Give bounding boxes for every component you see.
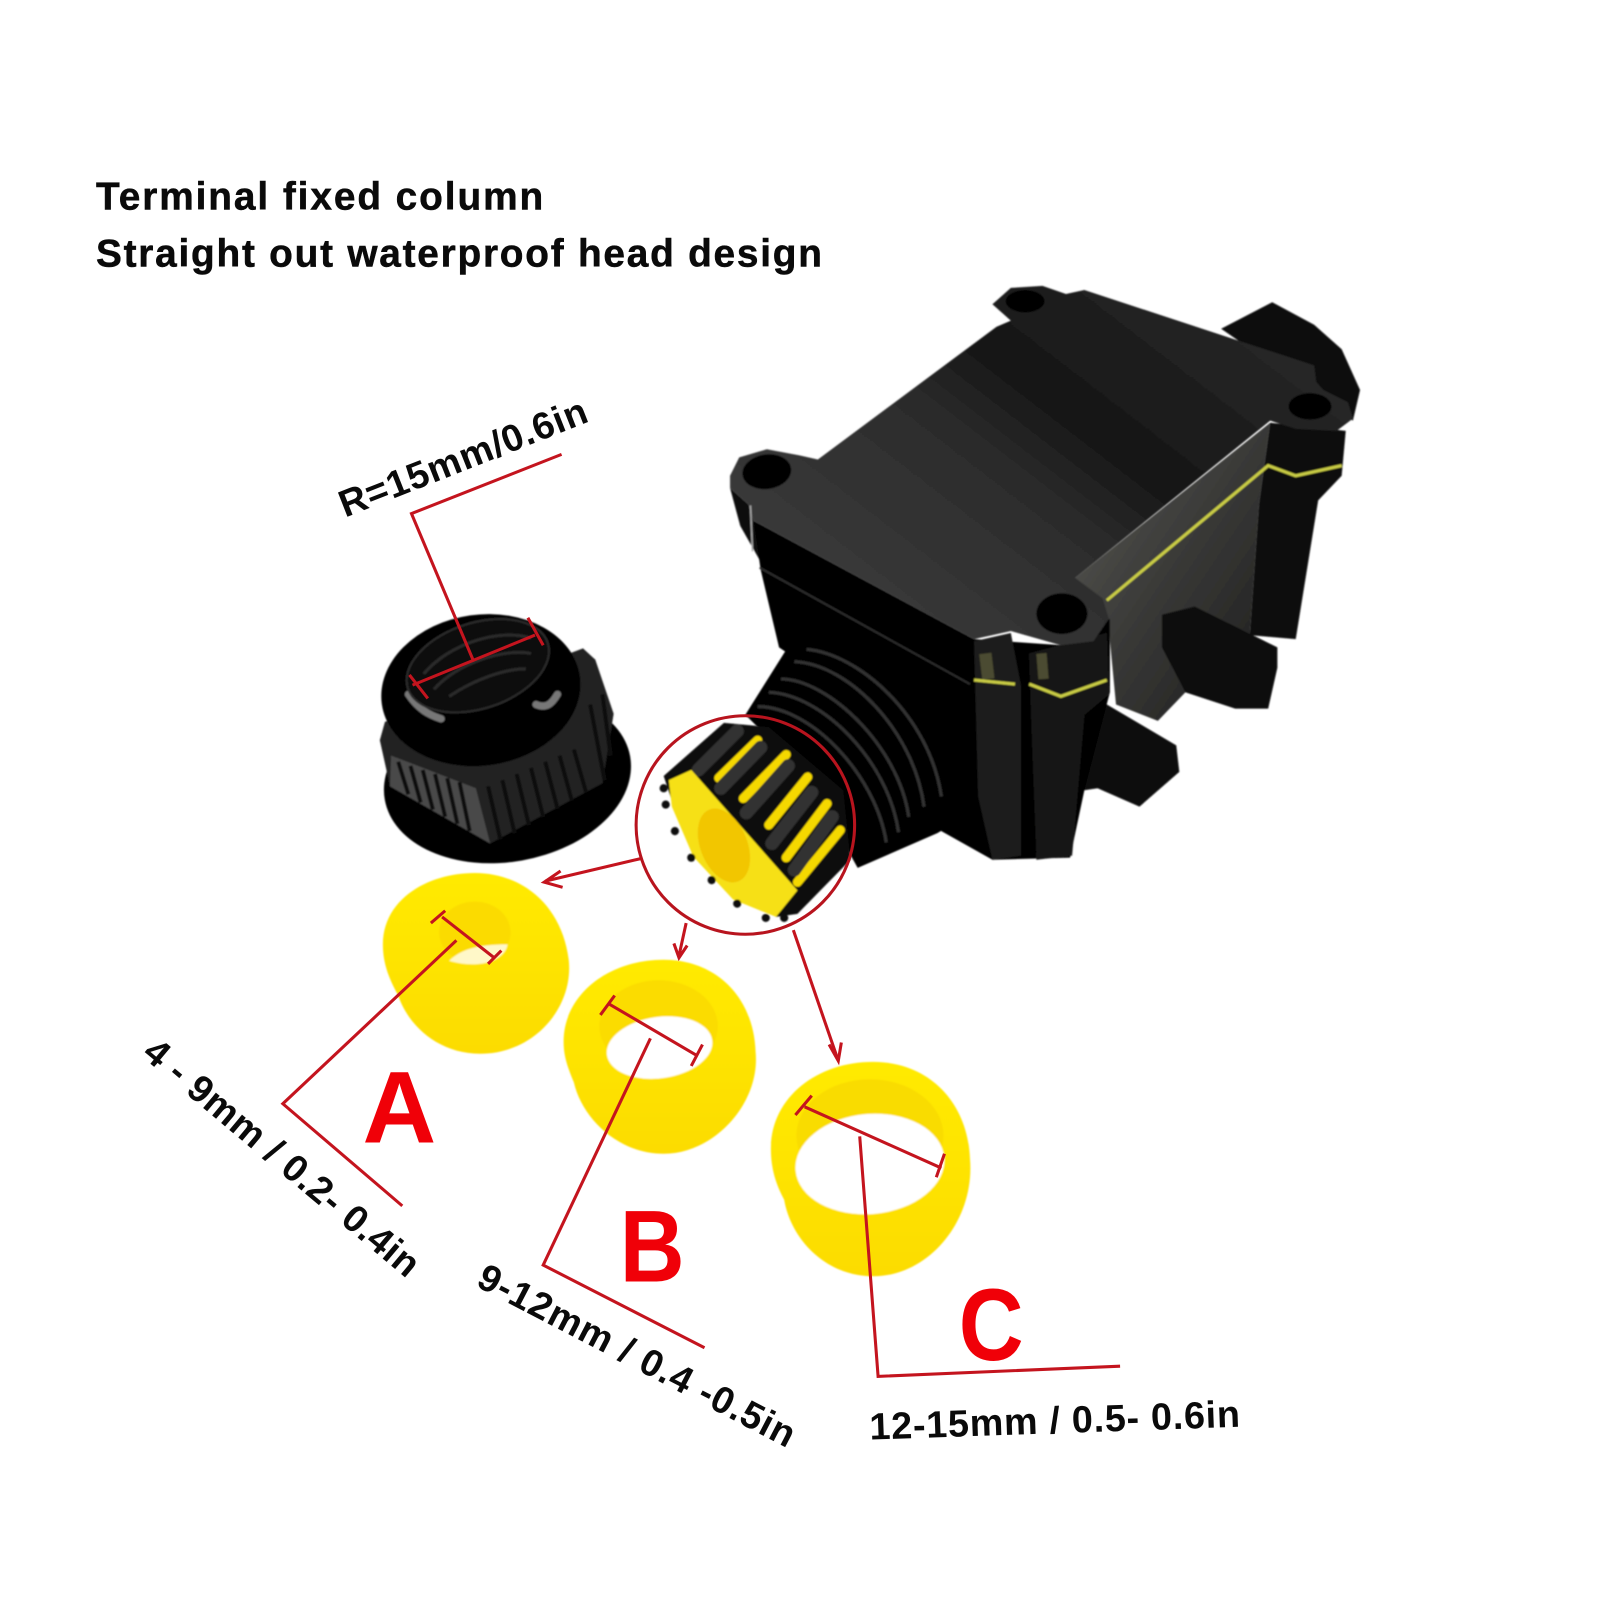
letter A: A: [362, 1051, 436, 1165]
rear connector: [1221, 302, 1360, 421]
screw holes: [740, 290, 1331, 634]
title: Straight out waterproof head design: [96, 232, 822, 275]
gland cap: [660, 723, 851, 922]
lower mounting tab: [1077, 705, 1179, 807]
ring A hole: [449, 944, 507, 964]
rear mounting tab: [1162, 607, 1277, 709]
nut dome: [371, 601, 591, 779]
nut ribbed left face: [390, 756, 490, 843]
dome highlights: [408, 694, 557, 719]
yellow slots: [698, 731, 840, 882]
arrow to ring C: [793, 930, 841, 1061]
ring A size label: 4 - 9mm / 0.2- 0.4in: [135, 1030, 428, 1286]
black grille: [664, 723, 851, 917]
ring B hole: [603, 1010, 716, 1085]
callout: cap circle: [636, 716, 855, 934]
arrow to ring A: [544, 859, 640, 887]
left lug side: [730, 488, 762, 564]
cap teeth: [660, 784, 788, 922]
ring B: [564, 960, 756, 1154]
threaded neck: [745, 638, 965, 868]
lid: [730, 286, 1353, 645]
nut inner thread: [424, 635, 531, 696]
letter B: B: [620, 1190, 685, 1304]
right corner column: [1250, 423, 1346, 639]
ring C bore: [796, 1079, 943, 1192]
ring A: [383, 873, 569, 1054]
front corner columns: [974, 633, 1109, 860]
ring C dimension lines: [795, 1096, 1120, 1376]
ring C body: [771, 1062, 970, 1276]
ring C hole: [791, 1108, 949, 1220]
nut ribs: [398, 694, 611, 839]
yellow gasket line: [974, 466, 1342, 696]
ring A body: [383, 873, 569, 1054]
nut flange: [370, 674, 645, 882]
thread ribs: [758, 649, 941, 842]
right body face: [1075, 423, 1276, 721]
ring C: [771, 1062, 970, 1276]
nut opening: [395, 602, 561, 729]
junction box: [730, 286, 1360, 868]
hex nut: [370, 601, 645, 882]
cap bore: [688, 801, 760, 890]
ring B body: [564, 960, 756, 1154]
ring A dimension lines: [283, 911, 501, 1206]
left lug highlight: [750, 505, 753, 551]
lid seam: [760, 568, 970, 684]
ring B bore: [599, 980, 718, 1072]
ring B size label: 9-12mm / 0.4 -0.5in: [471, 1256, 802, 1456]
arrow to ring B: [674, 923, 687, 958]
ring B dimension lines: [543, 996, 705, 1348]
yellow cap body: [669, 770, 797, 917]
nut hex body: [380, 648, 614, 843]
ring A bore: [439, 902, 511, 963]
letter C: C: [959, 1269, 1024, 1382]
nut radius label: R=15mm/0.6in: [333, 390, 594, 526]
nut dimension lines: [409, 454, 562, 698]
title: [96, 175, 822, 275]
title: Terminal fixed column: [96, 175, 543, 218]
front body: [754, 521, 1110, 860]
ring C size label: 12-15mm / 0.5- 0.6in: [869, 1394, 1241, 1449]
